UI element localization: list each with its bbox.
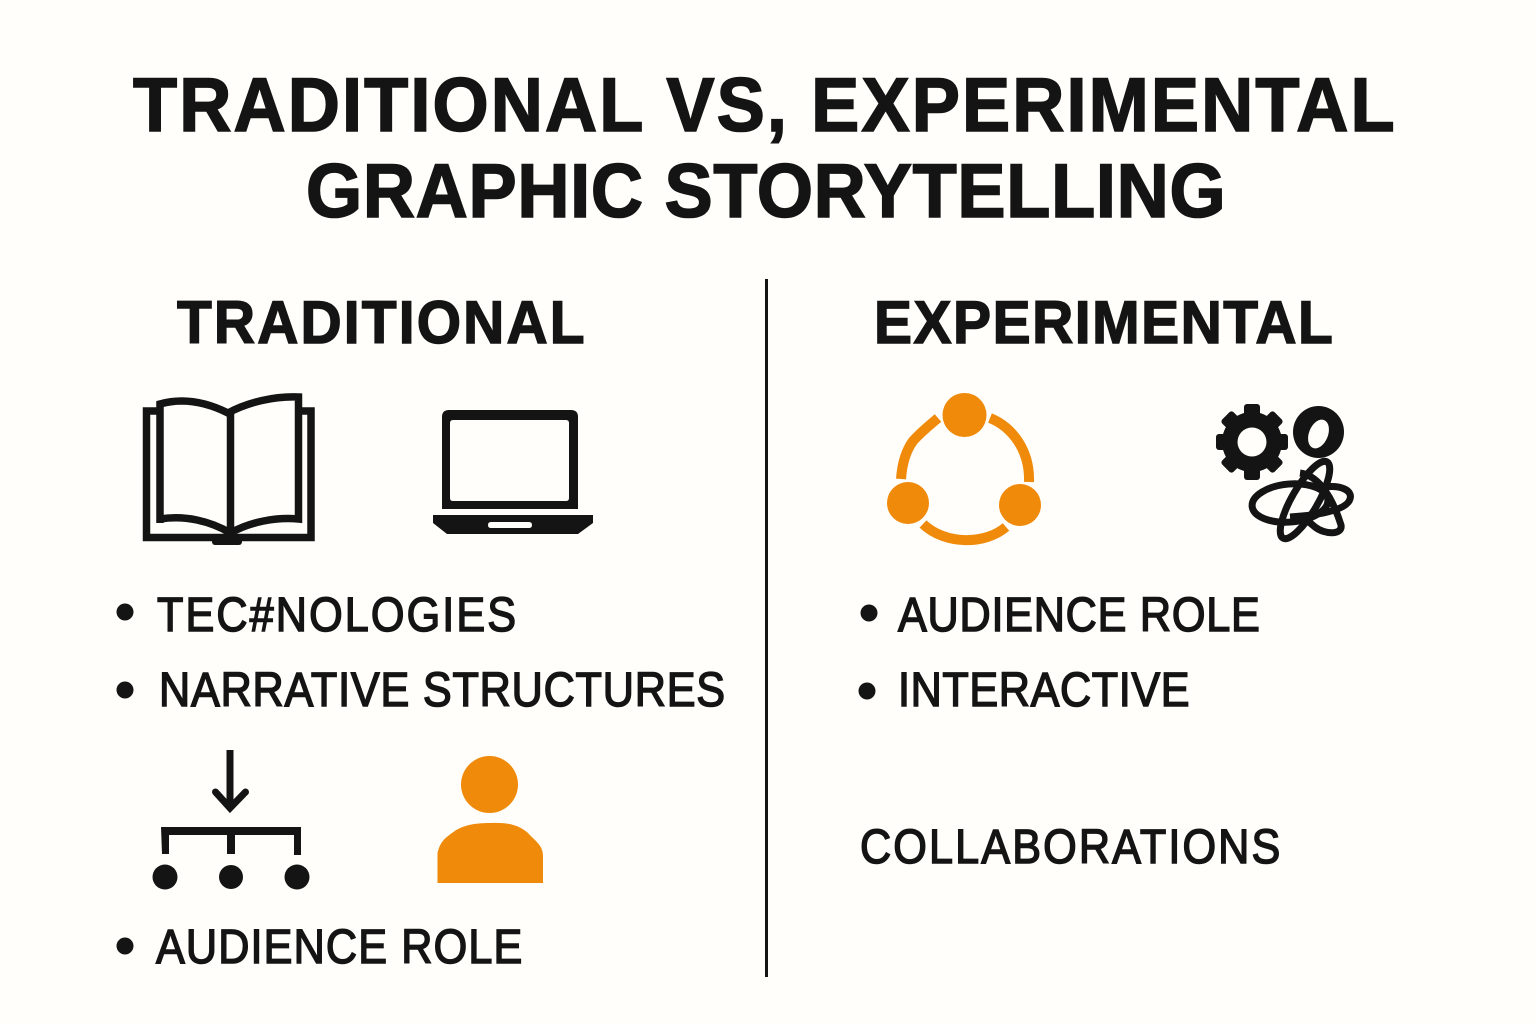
heading: experimental: EXPERIMENTAL xyxy=(874,290,1333,356)
icon: hierarchy with arrow xyxy=(152,750,310,890)
bullet: narrative structures: NARRATIVE STRUCTURES xyxy=(159,663,725,717)
panel: traditional xyxy=(116,290,725,974)
icon: open book xyxy=(146,397,311,545)
label: collaborations: COLLABORATIONS xyxy=(860,820,1280,874)
bullet: technologies: TEC#NOLOGIES xyxy=(157,588,516,642)
title xyxy=(133,62,1395,233)
icon: laptop xyxy=(433,410,593,534)
title: TRADITIONAL VS, EXPERIMENTAL xyxy=(133,62,1395,147)
bullet: audience role: AUDIENCE ROLE xyxy=(156,920,522,974)
bullet: interactive: INTERACTIVE xyxy=(898,663,1190,717)
panel: experimental xyxy=(858,290,1350,874)
heading: traditional: TRADITIONAL xyxy=(177,290,585,356)
icon: orange network cycle xyxy=(887,393,1041,540)
icon: gear, ring and atom xyxy=(1216,404,1350,545)
icon: person xyxy=(438,756,543,883)
title: GRAPHIC STORYTELLING xyxy=(306,148,1226,233)
center divider xyxy=(765,279,768,977)
bullet: audience role: AUDIENCE ROLE xyxy=(898,588,1260,642)
